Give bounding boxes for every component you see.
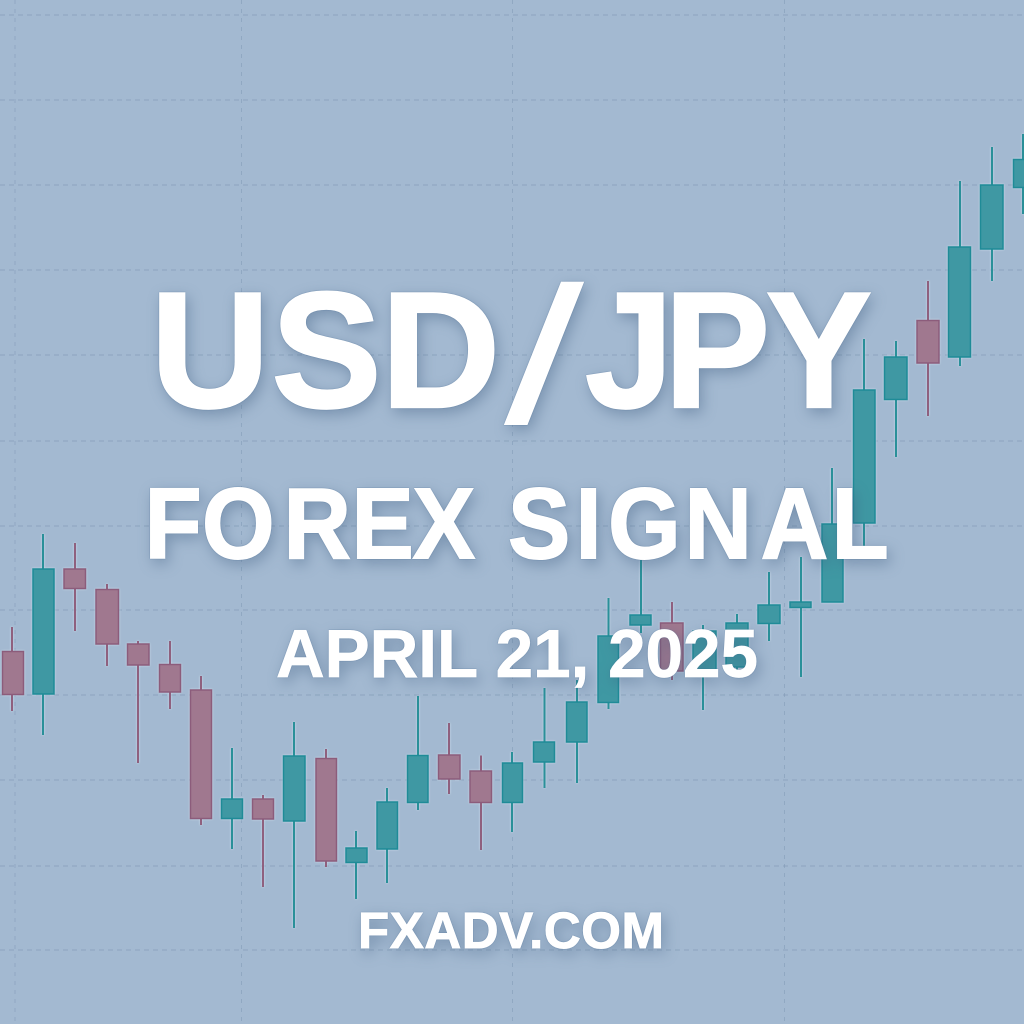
candle 9 bearish: [252, 795, 274, 887]
candle 23 bullish: [693, 625, 716, 710]
candle 2 bullish: [33, 534, 54, 735]
candlestick chart: [2, 134, 1024, 928]
candle 5 bearish: [128, 641, 149, 763]
candle 31 bullish: [948, 181, 970, 366]
candle 6 bearish: [160, 641, 180, 709]
subtitle: FOREX SIGNAL: FOREX SIGNAL: [145, 469, 889, 580]
candle 27 bullish: [822, 468, 843, 602]
candle 10 bullish: [284, 722, 305, 928]
candle 12 bullish: [346, 831, 367, 899]
candle 1 bearish: [2, 627, 24, 711]
candle 25 bullish: [758, 572, 780, 641]
title: USD/JPY: JPY: [585, 259, 872, 443]
candle 7 bearish: [190, 676, 212, 825]
candle 14 bullish: [408, 696, 428, 810]
candle 8 bullish: [222, 748, 242, 849]
title: USD/JPY: USD: [150, 258, 500, 442]
title: USD/JPY: /: [497, 250, 591, 459]
candle 17 bullish: [502, 752, 522, 832]
candle 26 bullish: [790, 557, 811, 677]
candle 11 bearish: [316, 749, 336, 867]
title: USD/JPY: [150, 250, 872, 459]
candle 18 bullish: [534, 688, 554, 788]
candle 13 bullish: [377, 788, 398, 883]
candle 16 bearish: [470, 756, 492, 850]
candle 19 bullish: [566, 680, 587, 783]
candle 28 bullish: [854, 339, 875, 546]
candle 33 bullish: [1014, 134, 1024, 214]
candle 24 bullish: [726, 614, 748, 672]
candle 20 bullish: [598, 598, 618, 709]
candle 22 bearish: [660, 602, 683, 680]
candle 3 bearish: [64, 543, 86, 631]
date: APRIL 21, 2025: APRIL 21, 2025: [276, 616, 758, 692]
candle 15 bearish: [438, 723, 460, 794]
candle 4 bearish: [96, 584, 118, 666]
website: FXADV.COM: FXADV.COM: [358, 902, 664, 959]
candle 21 bullish: [630, 560, 651, 633]
candle 29 bullish: [884, 341, 907, 457]
candle 30 bearish: [917, 281, 939, 416]
candle 32 bullish: [980, 147, 1003, 281]
